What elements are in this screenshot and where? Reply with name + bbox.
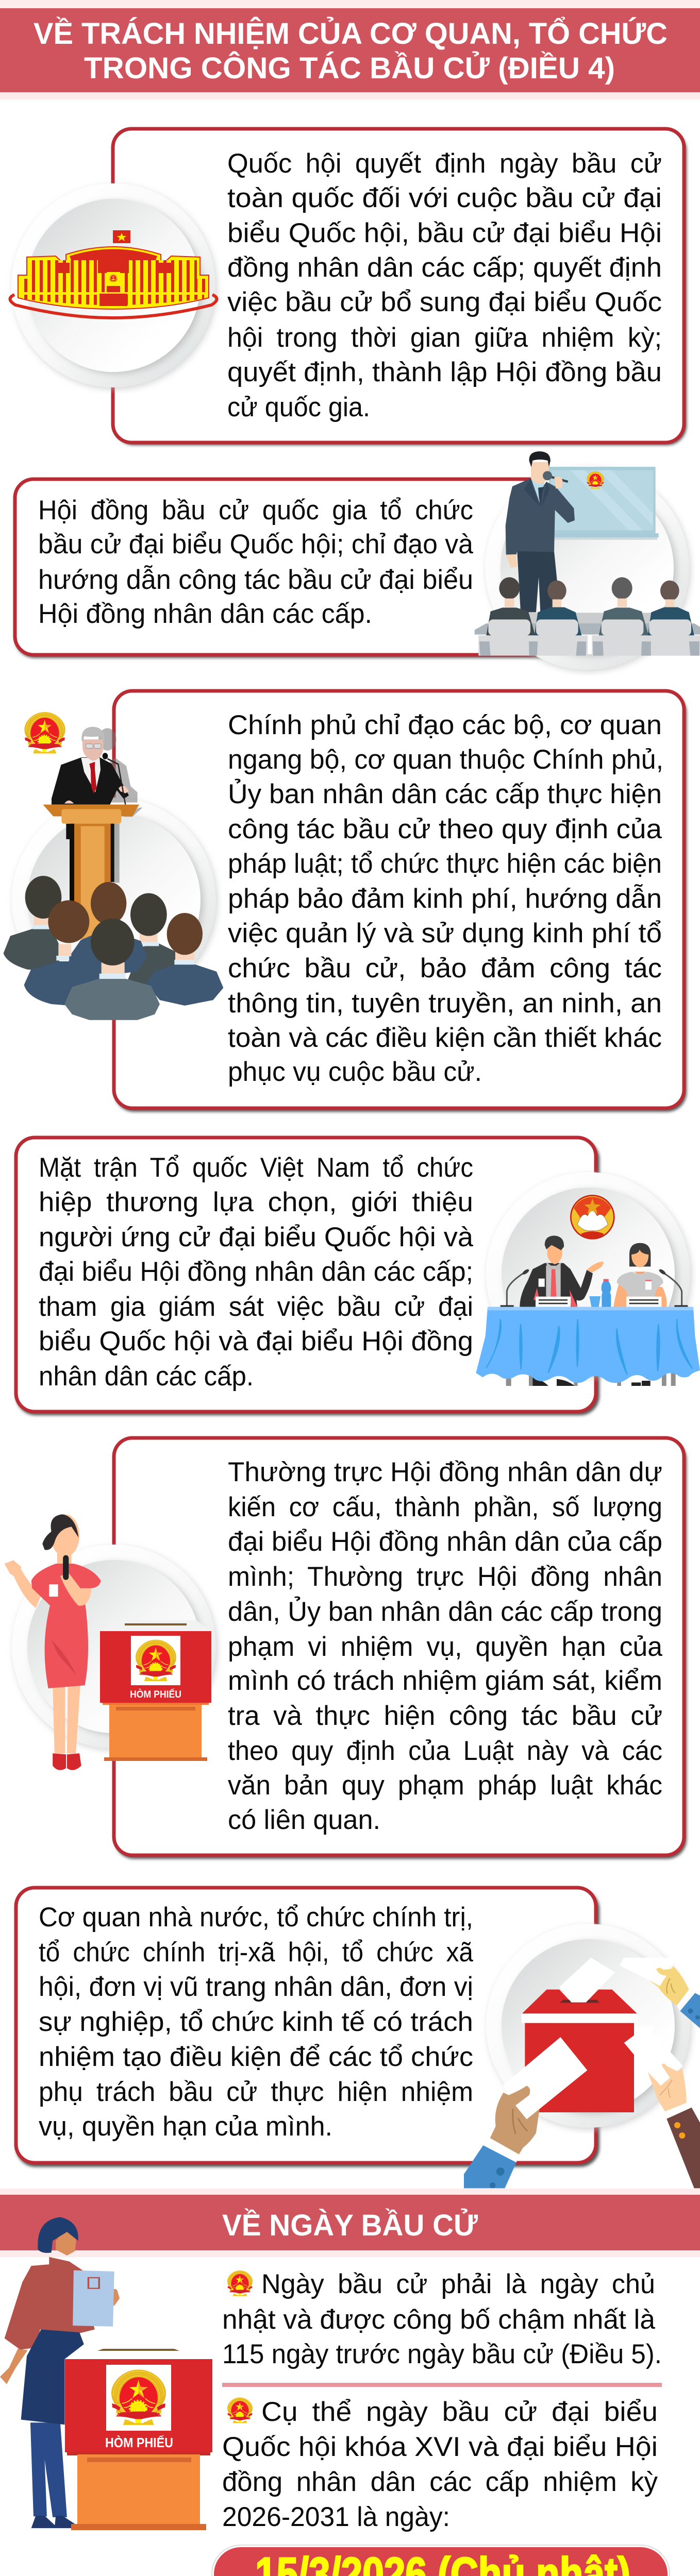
text block: Chính phủ chỉ đạo các bộ, cơ quan [228,710,662,740]
text block: phục vụ cuộc bầu cử. [228,1057,482,1087]
text block: cử quốc gia. [227,392,370,422]
card frame [114,1438,687,1859]
emblem bullet [227,2270,253,2296]
election date text: 115 ngày trước ngày bầu cử (Điều 5). [222,2339,662,2369]
card frame [16,1138,599,1415]
text block: hội, đơn vị vũ trang nhân dân, đơn vị [39,1972,473,2002]
text block: mình; Thường trực Hội đồng nhân [228,1562,662,1592]
ballot box [100,1620,211,1761]
icon: disc [485,466,691,672]
text block: toàn và các điều kiện cần thiết khác [228,1023,662,1053]
tablecloth [476,1307,700,1383]
icon: hands casting ballots [464,1958,700,2188]
text block: toàn quốc đối với cuộc bầu cử đại [227,183,662,213]
text block [228,1457,663,1835]
text block [228,710,663,1087]
panel: Hội đồng bầu cử quốc gia [15,451,700,672]
text block: pháp bảo đảm kinh phí, hướng dẫn [228,884,662,914]
text block [38,495,473,629]
emblem [24,712,65,754]
text block: tổ chức chính trị-xã hội, tổ chức xã [39,1937,473,1968]
election date text: 2026-2031 là ngày: [222,2502,450,2532]
text block: theo quy định của Luật này và các [228,1736,662,1766]
text block: việc bầu cử bổ sung đại biểu Quốc [227,287,662,317]
woman [5,1514,101,1770]
woman [0,2217,120,2528]
podium [43,805,139,939]
election date text: Cụ thể ngày bầu cử đại biểu [261,2397,658,2427]
ballot box: HÒM PHIẾU [105,2435,173,2450]
text block [227,148,662,422]
title banner: VỀ TRÁCH NHIỆM CỦA CƠ QUAN, TỔ CHỨC [34,17,668,50]
text block: mình có trách nhiệm giám sát, kiểm [228,1666,662,1696]
text block: có liên quan. [228,1805,380,1835]
section heading: Về ngày bầu cử: VỀ NGÀY BẦU CỬ [222,2209,478,2242]
icon: disc [12,798,218,1004]
icon: speaker at podium with audience [4,727,223,1020]
icon: disc [486,1924,692,2130]
text block: vụ, quyền hạn của mình. [39,2111,332,2142]
card frame [114,691,687,1112]
election date text: Quốc hội khóa XVI và đại biểu Hội [222,2432,658,2462]
microphones, bottle, glass and papers [501,1268,688,1307]
title banner: TRONG CÔNG TÁC BẦU CỬ (ĐIỀU 4) [84,52,615,85]
ballot box [522,1958,683,2112]
male delegate [520,1235,604,1307]
text block: đồng nhân dân các cấp; quyết định [227,252,662,283]
icon: speaker with audience [475,451,700,656]
text block: Hội đồng bầu cử quốc gia tổ chức [38,495,473,526]
icon: disc [486,1172,692,1378]
text block: pháp luật; tổ chức thực hiện các biện [228,849,662,879]
audience [475,577,700,656]
text block: hội trong thời gian giữa nhiệm kỳ; [227,323,662,353]
left hand with ballot [464,2037,587,2188]
text block: Hội đồng nhân dân các cấp. [38,599,372,629]
text block: phạm vi nhiệm vụ, quyền hạn của [228,1632,663,1662]
table legs and shoes [506,1370,676,1386]
election date text: đồng nhân dân các cấp nhiệm kỳ [222,2467,658,2497]
panel: Cơ quan nhà nước [16,1888,700,2188]
text block: quyết định, thành lập Hội đồng bầu [227,357,662,387]
text block: đại biểu Hội đồng nhân dân các cấp; [39,1257,473,1287]
text block: phụ trách bầu cử thực hiện nhiệm [39,2077,473,2107]
panel: Chính phủ [4,691,687,1112]
icon: woman with microphone and ballot box [5,1514,211,1770]
audience [4,876,223,1020]
icon: disc [12,1545,218,1751]
election date text: Ngày bầu cử phải là ngày chủ [261,2269,655,2299]
text block [39,1153,474,1392]
right lower hand [648,2063,700,2188]
right upper hand with ballot [620,1958,700,2028]
ballot box: HÒM PHIẾU [130,1689,181,1700]
text block: nhân dân các cấp. [39,1361,254,1392]
panel: Mặt trận Tổ quốc [16,1138,700,1415]
text block: ngang bộ, cơ quan thuộc Chính phủ, [228,744,663,775]
Fatherland Front emblem [570,1195,615,1240]
ballot box [65,2349,212,2530]
text block: Quốc hội quyết định ngày bầu cử [227,148,662,179]
icon: woman with ballot at ballot box [0,2217,212,2530]
text block: đại biểu Hội đồng nhân dân của cấp [228,1527,662,1557]
text block: công tác bầu cử theo quy định của [228,814,662,844]
text block: tham gia giám sát việc bầu cử đại [39,1292,473,1322]
card frame [16,1888,599,2167]
female delegate [613,1243,667,1307]
text block: Thường trực Hội đồng nhân dân dự [228,1457,662,1487]
icon: National Assembly building [10,230,217,318]
emblem bullet [227,2397,253,2423]
speaker [506,451,575,612]
text block: người ứng cử đại biểu Quốc hội và [39,1222,474,1252]
text block: tra và thực hiện công tác bầu cử [228,1701,662,1731]
speaker [52,727,129,901]
text block: văn bản quy phạm pháp luật khác [228,1770,662,1801]
emblem [587,471,604,489]
text block: nhiệm tạo điều kiện để các tổ chức [39,2042,473,2072]
text block: Ủy ban nhân dân các cấp thực hiện [228,778,662,809]
text block: biểu Quốc hội và đại biểu Hội đồng [39,1326,473,1357]
election date text [222,2269,662,2532]
icon: disc [11,183,217,389]
text block: thông tin, tuyên truyền, an ninh, an [228,988,662,1019]
presentation screen [549,467,659,540]
text block: dân, Ủy ban nhân dân các cấp trong [228,1596,662,1627]
text block: chức bầu cử, bảo đảm công tác [228,953,662,984]
election date text: nhật và được công bố chậm nhất là [222,2304,656,2335]
text block: việc quản lý và sử dụng kinh phí tổ [228,918,662,948]
text block: sự nghiệp, tổ chức kinh tế có trách [39,2007,473,2037]
title banner [0,0,700,99]
card frame [113,129,687,445]
text block: hiệp thương lựa chọn, giới thiệu [39,1187,473,1217]
speaker shadow [98,728,143,883]
text block: bầu cử đại biểu Quốc hội; chỉ đạo và [38,529,473,560]
text block: Cơ quan nhà nước, tổ chức chính trị, [39,1902,473,1933]
text block [39,1902,473,2142]
section heading: Về ngày bầu cử [0,2189,700,2257]
text block: hướng dẫn công tác bầu cử đại biểu [38,565,473,595]
text block: Mặt trận Tổ quốc Việt Nam tổ chức [39,1153,473,1183]
panel: Quốc hội [10,129,687,445]
icon: delegates at a table [476,1195,700,1386]
card frame [15,479,597,658]
text block: biểu Quốc hội, bầu cử đại biểu Hội [227,218,662,248]
text block: kiến cơ cấu, thành phần, số lượng [228,1492,662,1522]
panel: Thường trực Hội đồng nhân dân [5,1438,687,1859]
